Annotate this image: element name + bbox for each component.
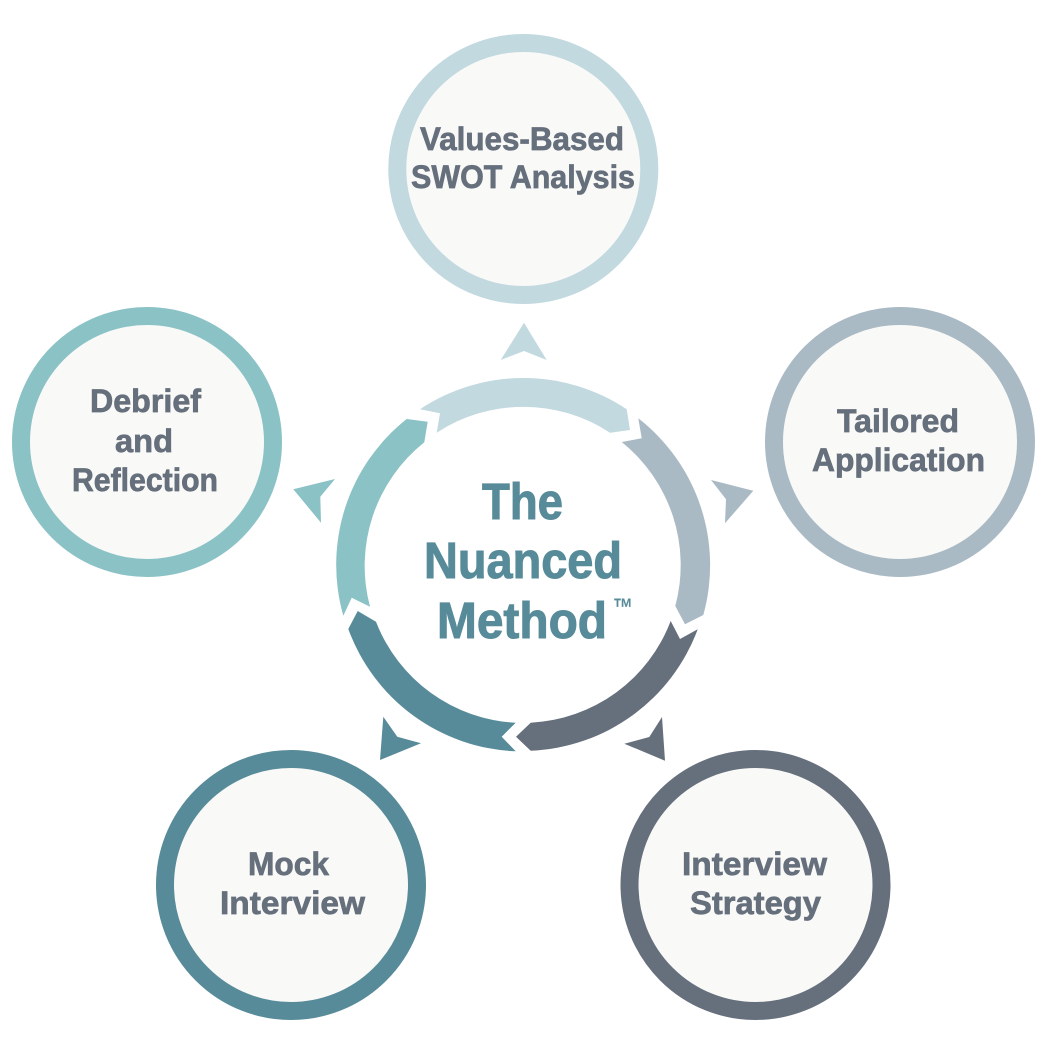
ring segment: interview strategy <box>516 621 698 751</box>
node: Interview Strategy: Interview <box>682 846 827 882</box>
ring segment: debrief and reflection <box>336 419 428 616</box>
arrow: to Debrief and Reflection <box>293 479 335 523</box>
node: Mock Interview: Mock <box>248 846 329 882</box>
node: Tailored Application: Tailored <box>837 403 959 439</box>
center title: Nuanced <box>424 532 622 589</box>
arrow: to Values-Based SWOT Analysis <box>501 323 547 360</box>
node: Interview Strategy <box>630 759 882 1011</box>
node: Debrief and Reflection: and <box>115 423 173 459</box>
ring segment: mock interview <box>348 611 516 751</box>
center title: ™ <box>613 593 633 623</box>
node: Debrief and Reflection: Reflection <box>72 462 218 498</box>
ring segment: tailored application <box>622 418 710 624</box>
node: Values-Based SWOT Analysis <box>397 43 649 295</box>
ring segment: values-based <box>420 378 630 433</box>
center title <box>424 473 633 649</box>
node: Values-Based SWOT Analysis: Values-Based <box>420 121 624 157</box>
node: Debrief and Reflection <box>21 316 273 568</box>
node: Mock Interview: Interview <box>220 885 365 921</box>
node: Values-Based SWOT Analysis: SWOT Analysis <box>411 159 635 195</box>
arrow: to Interview Strategy <box>624 717 665 761</box>
node: Interview Strategy: Strategy <box>690 885 821 921</box>
arrow: to Mock Interview <box>380 717 421 760</box>
arrow: to Tailored Application <box>711 480 753 523</box>
node: Tailored Application <box>774 316 1026 568</box>
center title: Method <box>437 592 607 649</box>
center title: The <box>482 473 563 530</box>
cycle ring <box>336 378 710 751</box>
node: Tailored Application: Application <box>812 442 985 478</box>
node: Debrief and Reflection: Debrief <box>90 383 201 419</box>
node: Mock Interview <box>165 759 417 1011</box>
